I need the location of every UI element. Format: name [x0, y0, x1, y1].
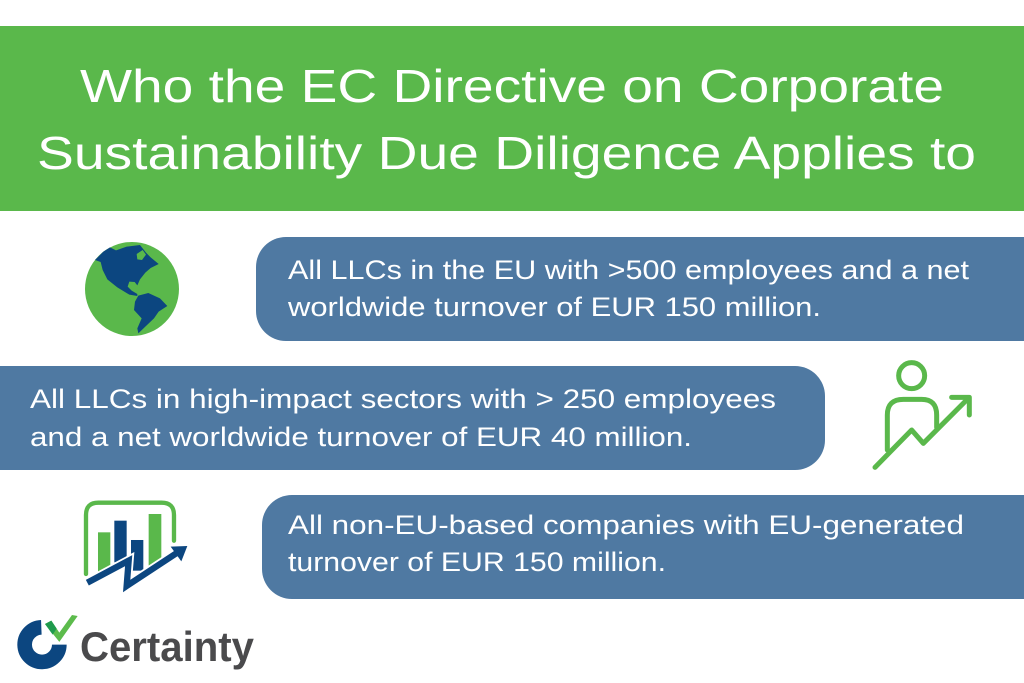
panel text: and a net worldwide turnover of EUR 40 million.: [30, 422, 692, 452]
title banner: [0, 26, 1024, 211]
panel text: [288, 510, 964, 577]
panel text: All non-EU-based companies with EU-generated: [288, 510, 964, 540]
title: Who the EC Directive on Corporate: [80, 60, 944, 112]
panel text: All LLCs in high-impact sectors with > 250 employees: [30, 384, 776, 414]
panel: EU LLCs: [256, 237, 1024, 341]
panel text: worldwide turnover of EUR 150 million.: [287, 292, 821, 322]
icon: bar chart with arrow: [86, 503, 187, 586]
icon: person with rising arrow: [875, 363, 969, 467]
icon: globe: [85, 242, 179, 336]
panel: high-impact sectors: [0, 366, 825, 470]
panel text: [30, 384, 776, 452]
logo mark: [25, 615, 78, 662]
title: [37, 60, 976, 179]
panel text: turnover of EUR 150 million.: [288, 547, 666, 577]
title: Sustainability Due Diligence Applies to: [37, 127, 976, 179]
logo wordmark: Certainty: [80, 623, 255, 670]
logo: Certainty: [25, 615, 255, 670]
panel: non-EU companies: [262, 495, 1024, 599]
panel text: All LLCs in the EU with >500 employees and a net: [288, 255, 970, 285]
panel text: [287, 255, 970, 322]
